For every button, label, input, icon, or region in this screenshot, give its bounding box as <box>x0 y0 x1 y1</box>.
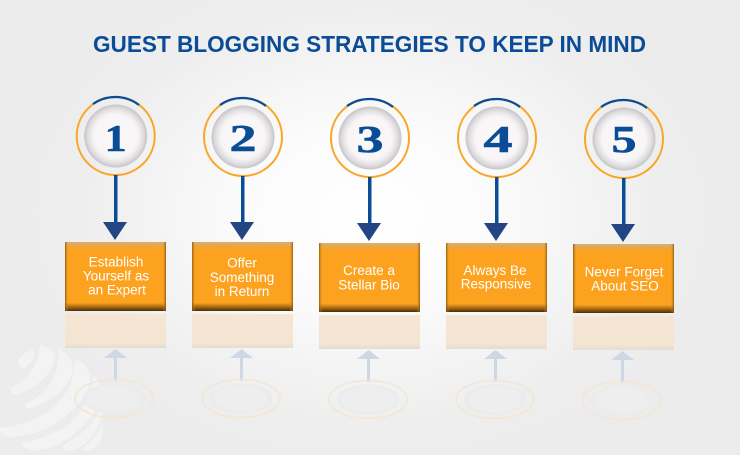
step 3 <box>319 99 420 418</box>
step 4 box: Always Be <box>463 263 527 278</box>
step 2 number: 2 <box>230 118 256 160</box>
step 2 arrow <box>230 176 254 240</box>
step 3 number: 3 <box>356 119 384 161</box>
step 2 <box>192 98 293 418</box>
step 1 box: Establish <box>89 254 143 270</box>
step 4 arrow <box>484 177 508 241</box>
step 5 <box>573 100 674 419</box>
step 3 box <box>319 243 420 312</box>
step 4 number: 4 <box>484 119 512 161</box>
step 1 box: Yourself as <box>83 268 149 284</box>
step 1 reflection <box>65 314 166 418</box>
step 3 reflection <box>319 315 420 418</box>
step 3 box: Create a <box>343 263 395 278</box>
step 2 box: in Return <box>215 284 269 299</box>
step 3 ring <box>331 99 409 177</box>
step 5 box: About SEO <box>591 278 659 294</box>
step 1 box <box>65 242 166 311</box>
step 1 box: an Expert <box>88 282 146 298</box>
step 5 number: 5 <box>612 119 636 161</box>
step 1 number: 1 <box>105 118 127 160</box>
step 5 reflection <box>573 316 674 420</box>
step 5 box <box>573 244 674 313</box>
title: GUEST BLOGGING STRATEGIES TO KEEP IN MIND <box>93 31 646 57</box>
globe watermark <box>0 345 103 451</box>
step 3 box: Stellar Bio <box>338 278 400 292</box>
step 4 box <box>446 243 547 312</box>
step 1 ring <box>77 97 155 175</box>
step 1 <box>65 97 166 418</box>
step 2 box: Offer <box>227 256 257 270</box>
step 2 ring <box>204 98 282 176</box>
step 4 box: Responsive <box>461 276 531 292</box>
step 5 arrow <box>611 178 635 242</box>
step 1 arrow <box>103 175 127 240</box>
step 2 box: Something <box>210 270 274 285</box>
step 4 ring <box>458 99 536 177</box>
step 4 <box>446 99 547 418</box>
step 2 box <box>192 242 293 311</box>
step 3 arrow <box>357 177 381 241</box>
step 5 ring <box>585 100 663 178</box>
step 5 box: Never Forget <box>585 264 664 280</box>
step 4 reflection <box>446 315 547 418</box>
step 2 reflection <box>192 314 293 418</box>
